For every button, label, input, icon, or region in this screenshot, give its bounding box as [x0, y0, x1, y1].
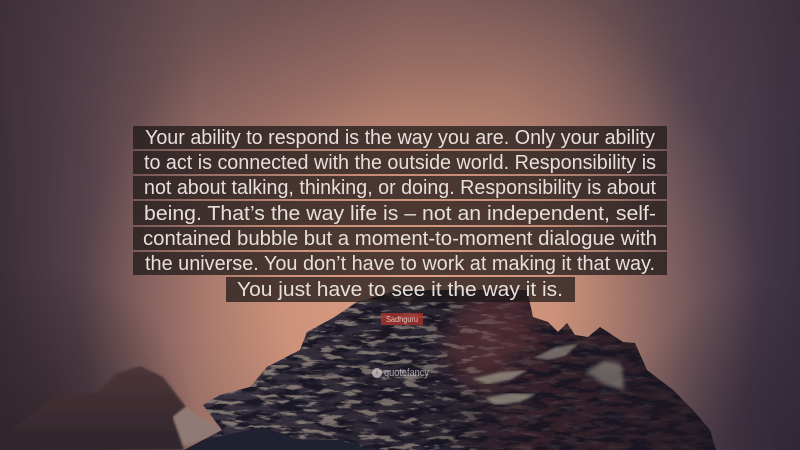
dark ridge in front [184, 427, 372, 450]
icon: quote circle: “ [376, 370, 378, 380]
snow texture [200, 290, 716, 450]
watermark logo: quotefancy [384, 367, 429, 379]
line 5: contained bubble but a moment-to-moment dialogue with [143, 228, 657, 250]
author badge: Sadhguru [386, 314, 418, 324]
line 6: the universe. You don’t have to work at making it that way. [145, 253, 655, 275]
watermark logo [372, 367, 429, 380]
rock face: reddish buttress [440, 290, 535, 390]
line 4: being. That’s the way life is – not an independent, self- [144, 203, 656, 225]
quote text [133, 126, 667, 302]
snow patch: right face [585, 360, 624, 390]
snow patch: right shoulder [534, 344, 578, 360]
snow patch: centre ledge [472, 370, 528, 384]
left foggy peak [42, 366, 220, 450]
line 7: You just have to see it the way it is. [237, 279, 563, 301]
snow patch: lower ledge [485, 393, 536, 405]
main mountain [184, 290, 716, 450]
line 1: Your ability to respond is the way you are. Only your ability [145, 127, 655, 149]
line 3: not about talking, thinking, or doing. Responsibility is about [144, 177, 656, 199]
rock texture: dark shadow bands [184, 290, 716, 450]
line 2: to act is connected with the outside world. Responsibility is [144, 152, 656, 174]
